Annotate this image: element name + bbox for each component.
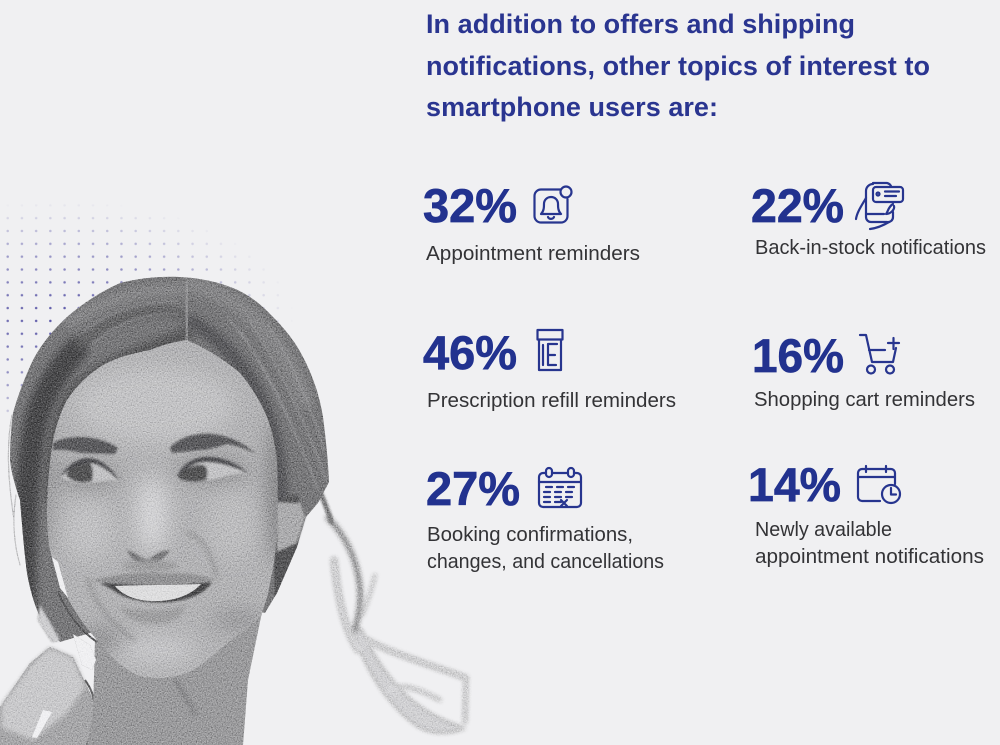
stat: 22% back-in-stock notifications: Back-in-stock notifications	[755, 237, 986, 259]
stat: 14% newly available appointment notifications: Newly available	[755, 519, 892, 541]
stat: 46% prescription refill reminders: Prescription refill reminders	[427, 390, 676, 412]
face	[47, 340, 278, 678]
icon: hand holding phone	[856, 183, 903, 229]
left eye	[60, 458, 120, 483]
stat: 27% booking confirmations: 27%	[426, 462, 520, 515]
eyebrows	[53, 434, 257, 455]
ear	[276, 502, 305, 552]
stat: 16% shopping cart reminders: Shopping cart reminders	[754, 389, 975, 411]
nose	[122, 550, 178, 572]
icon: calendar with cross	[539, 468, 581, 507]
right eye	[177, 457, 249, 481]
mouth	[92, 573, 216, 624]
icon: calendar with clock	[858, 466, 900, 503]
heading: In addition to offers and shipping	[426, 9, 855, 39]
stat: 14% newly available appointment notifications: appointment notifications	[755, 546, 984, 568]
stat: 22% back-in-stock notifications	[751, 179, 986, 259]
stat: 27% booking confirmations: Booking confirmations,	[427, 524, 633, 546]
icon: pill bottle	[538, 330, 562, 370]
portrait: smiling woman	[0, 270, 466, 745]
shoulder	[0, 647, 97, 745]
stat: 14% newly available appointment notifications: 14%	[748, 458, 841, 511]
icon: shopping cart plus	[860, 335, 899, 374]
stat: 16% shopping cart reminders: 16%	[752, 329, 844, 382]
fine outer wisps	[8, 415, 20, 565]
stat: 32% appointment reminders: Appointment reminders	[426, 243, 640, 265]
stat: 27% booking confirmations: changes, and cancellations	[427, 551, 664, 573]
loose hair strand	[318, 488, 466, 733]
neck	[87, 612, 262, 745]
heading: smartphone users are:	[426, 92, 718, 122]
stat: 16% shopping cart reminders	[752, 329, 975, 411]
stat: 14% newly available appointment notifications	[748, 458, 984, 568]
stat: 22% back-in-stock notifications: 22%	[751, 179, 844, 232]
decorative dot grid	[6, 204, 279, 412]
hair	[0, 270, 340, 650]
heading	[426, 9, 930, 122]
heading: notifications, other topics of interest to	[426, 51, 930, 81]
stat: 32% appointment reminders	[423, 179, 640, 265]
stat: 27% booking confirmations	[426, 462, 664, 573]
stat: 32% appointment reminders: 32%	[423, 179, 517, 232]
stat: 46% prescription refill reminders	[423, 326, 676, 412]
jaw strand and white gaps	[38, 557, 196, 715]
icon: bell notification	[534, 186, 572, 222]
stat: 46% prescription refill reminders: 46%	[423, 326, 517, 379]
